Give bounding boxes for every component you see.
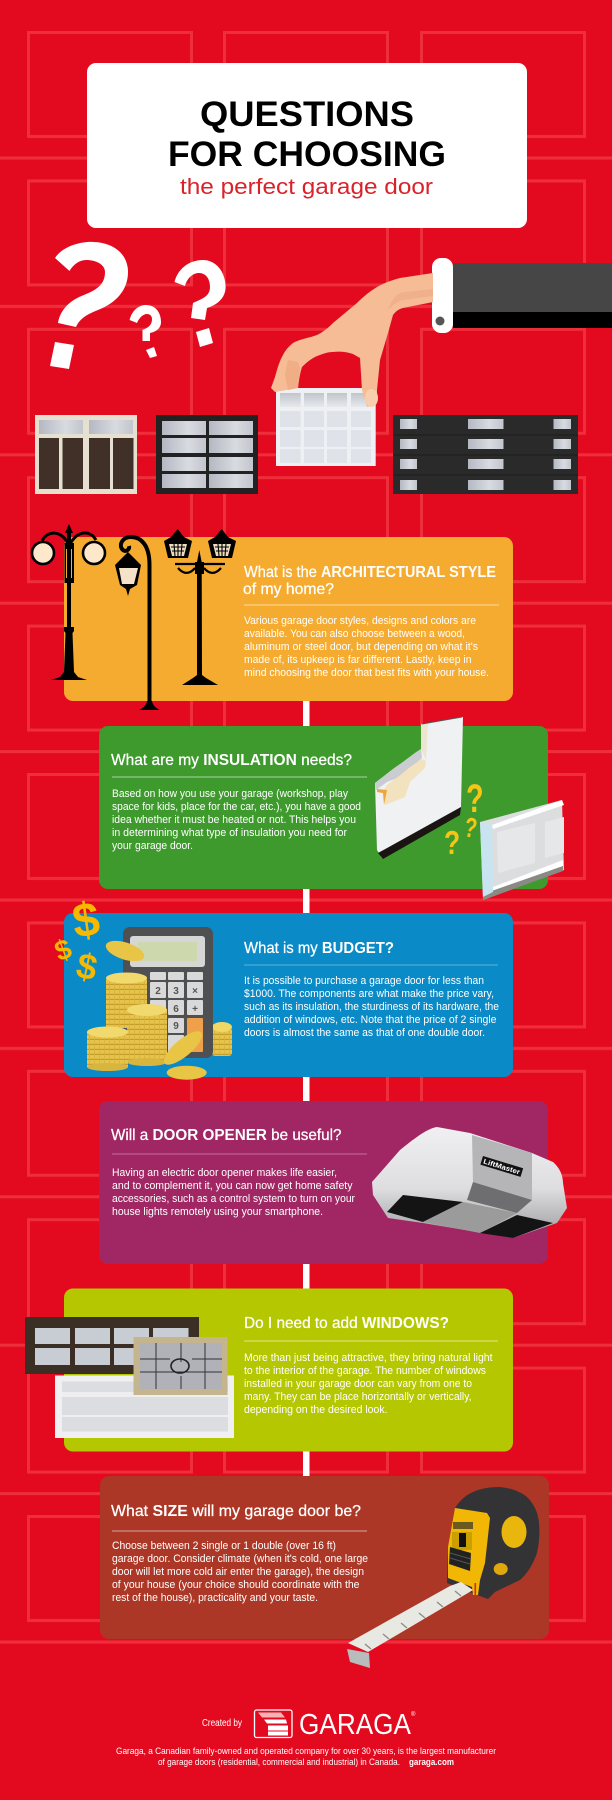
icon: dollar signs: $ <box>69 893 103 949</box>
text block: It is possible to purchase a garage door for less than <box>244 975 484 987</box>
door: white held by hand <box>276 388 376 466</box>
logo: GARAGA <box>299 1709 412 1741</box>
panel: size <box>100 1476 549 1668</box>
text block: to the interior of the garage. The number of windows <box>244 1365 486 1377</box>
icon: garage door opener: LiftMaster <box>482 1158 521 1176</box>
icon: yellow question marks: ? <box>466 776 484 821</box>
text block: $1000. The components are what make the price vary, <box>244 988 494 1000</box>
text block: door will let more cold air enter the garage), the design <box>112 1566 364 1578</box>
icon: windows <box>25 1317 234 1438</box>
icon: calculator and coins: 3 <box>173 986 179 997</box>
text block: garage door. Consider climate (when it's cold, one large <box>112 1553 368 1565</box>
icon: garage door opener <box>372 1127 567 1238</box>
subtitle: the perfect garage door <box>180 174 433 199</box>
company description <box>116 1746 497 1768</box>
logo: ® <box>411 1711 416 1718</box>
heading: Will a DOOR OPENER be useful? <box>111 1127 342 1144</box>
heading: of my home? <box>243 581 334 598</box>
text block <box>112 788 361 852</box>
heading: Do I need to add WINDOWS? <box>244 1315 449 1332</box>
icon: yellow question marks <box>444 776 484 862</box>
text block: of your house (your choice should coordinate with the <box>112 1579 360 1591</box>
icon: dollar signs: $ <box>50 933 76 967</box>
door: black with glass panels <box>156 415 258 494</box>
text block <box>244 615 489 679</box>
text block: rest of the house), practicality and your taste. <box>112 1592 318 1604</box>
text block <box>244 975 499 1039</box>
text block: accessories, such as a control system to turn on your <box>112 1193 355 1205</box>
text block: Choose between 2 single or 1 double (over 16 ft) <box>112 1540 336 1552</box>
icon: question marks <box>50 242 226 369</box>
icon: calculator and coins: 9 <box>173 1021 179 1032</box>
door: dark with small windows <box>393 415 578 494</box>
heading <box>243 564 496 598</box>
icon: yellow question marks: ? <box>462 812 479 845</box>
text block: in determining what type of insulation you need for <box>112 827 347 839</box>
icon: white door panel <box>480 800 564 900</box>
company description: of garage doors (residential, commercial and industrial) in Canada. <box>158 1757 400 1768</box>
text block: Having an electric door opener makes life easier, <box>112 1167 337 1179</box>
text block: made of, its upkeep is far different. Lastly, keep in <box>244 654 472 666</box>
icon: yellow question marks: ? <box>444 825 460 862</box>
text block: idea whether it must be heated or not. This helps you <box>112 814 356 826</box>
panel: door opener <box>99 1101 567 1264</box>
text block: installed in your garage door can vary from one to <box>244 1378 472 1390</box>
company description: garaga.com <box>409 1757 454 1768</box>
text block: addition of windows, etc. Note that the price of 2 single <box>244 1014 497 1026</box>
title: FOR CHOOSING <box>168 135 446 174</box>
icon: calculator and coins: 2 <box>155 986 161 997</box>
text block: Based on how you use your garage (workshop, play <box>112 788 349 800</box>
created by: Created by <box>202 1718 242 1729</box>
panel: budget <box>50 893 513 1080</box>
text block: space for kids, place for the car, etc.), you have a good <box>112 801 361 813</box>
panel: architectural style <box>32 524 513 710</box>
panel: insulation <box>99 717 564 900</box>
text block: Various garage door styles, designs and colors are <box>244 615 476 627</box>
title: QUESTIONS <box>200 95 414 134</box>
icon: calculator and coins: 6 <box>173 1004 179 1015</box>
icon: calculator and coins: + <box>192 1004 198 1015</box>
text block <box>112 1167 355 1218</box>
icon: insulated door section <box>375 717 463 859</box>
icon: sleeve and cuff <box>432 258 612 333</box>
text block: mind choosing the door that best fits with your house. <box>244 667 489 679</box>
text block: aluminum or steel door, but depending on what it's <box>244 641 478 653</box>
icon: calculator and coins <box>87 927 232 1080</box>
text block: available. You can also choose between a wood, <box>244 628 465 640</box>
text block: More than just being attractive, they bring natural light <box>244 1352 493 1364</box>
title panel <box>87 63 527 228</box>
text block: your garage door. <box>112 840 193 852</box>
text block: house lights remotely using your smartphone. <box>112 1206 323 1218</box>
panel: windows <box>25 1288 513 1452</box>
icon: tape measure <box>347 1487 539 1668</box>
heading: What SIZE will my garage door be? <box>111 1503 361 1520</box>
icon: dollar signs <box>50 893 103 989</box>
text block: depending on the desired look. <box>244 1404 388 1416</box>
text block: many. They can be place horizontally or vertically, <box>244 1391 472 1403</box>
text block: and to complement it, you can now get home safety <box>112 1180 353 1192</box>
icon: calculator and coins: × <box>192 986 198 997</box>
heading: What is my BUDGET? <box>244 940 394 957</box>
icon: street lamps <box>32 524 236 710</box>
text block: doors is almost the same as that of one double door. <box>244 1027 485 1039</box>
icon: dollar signs: $ <box>73 944 101 989</box>
logo <box>254 1709 416 1741</box>
connectors <box>303 701 310 1476</box>
door: beige with windows <box>35 415 137 494</box>
text block: such as its insulation, the sturdiness of its hardware, the <box>244 1001 499 1013</box>
heading: What is the ARCHITECTURAL STYLE <box>244 564 496 581</box>
footer <box>116 1709 497 1768</box>
title <box>168 95 446 174</box>
company description: Garaga, a Canadian family-owned and operated company for over 30 years, is the largest manufacturer <box>116 1746 497 1757</box>
text block <box>112 1540 368 1604</box>
heading: What are my INSULATION needs? <box>111 752 352 769</box>
icon: hand holding white door <box>271 273 433 466</box>
text block <box>244 1352 493 1416</box>
